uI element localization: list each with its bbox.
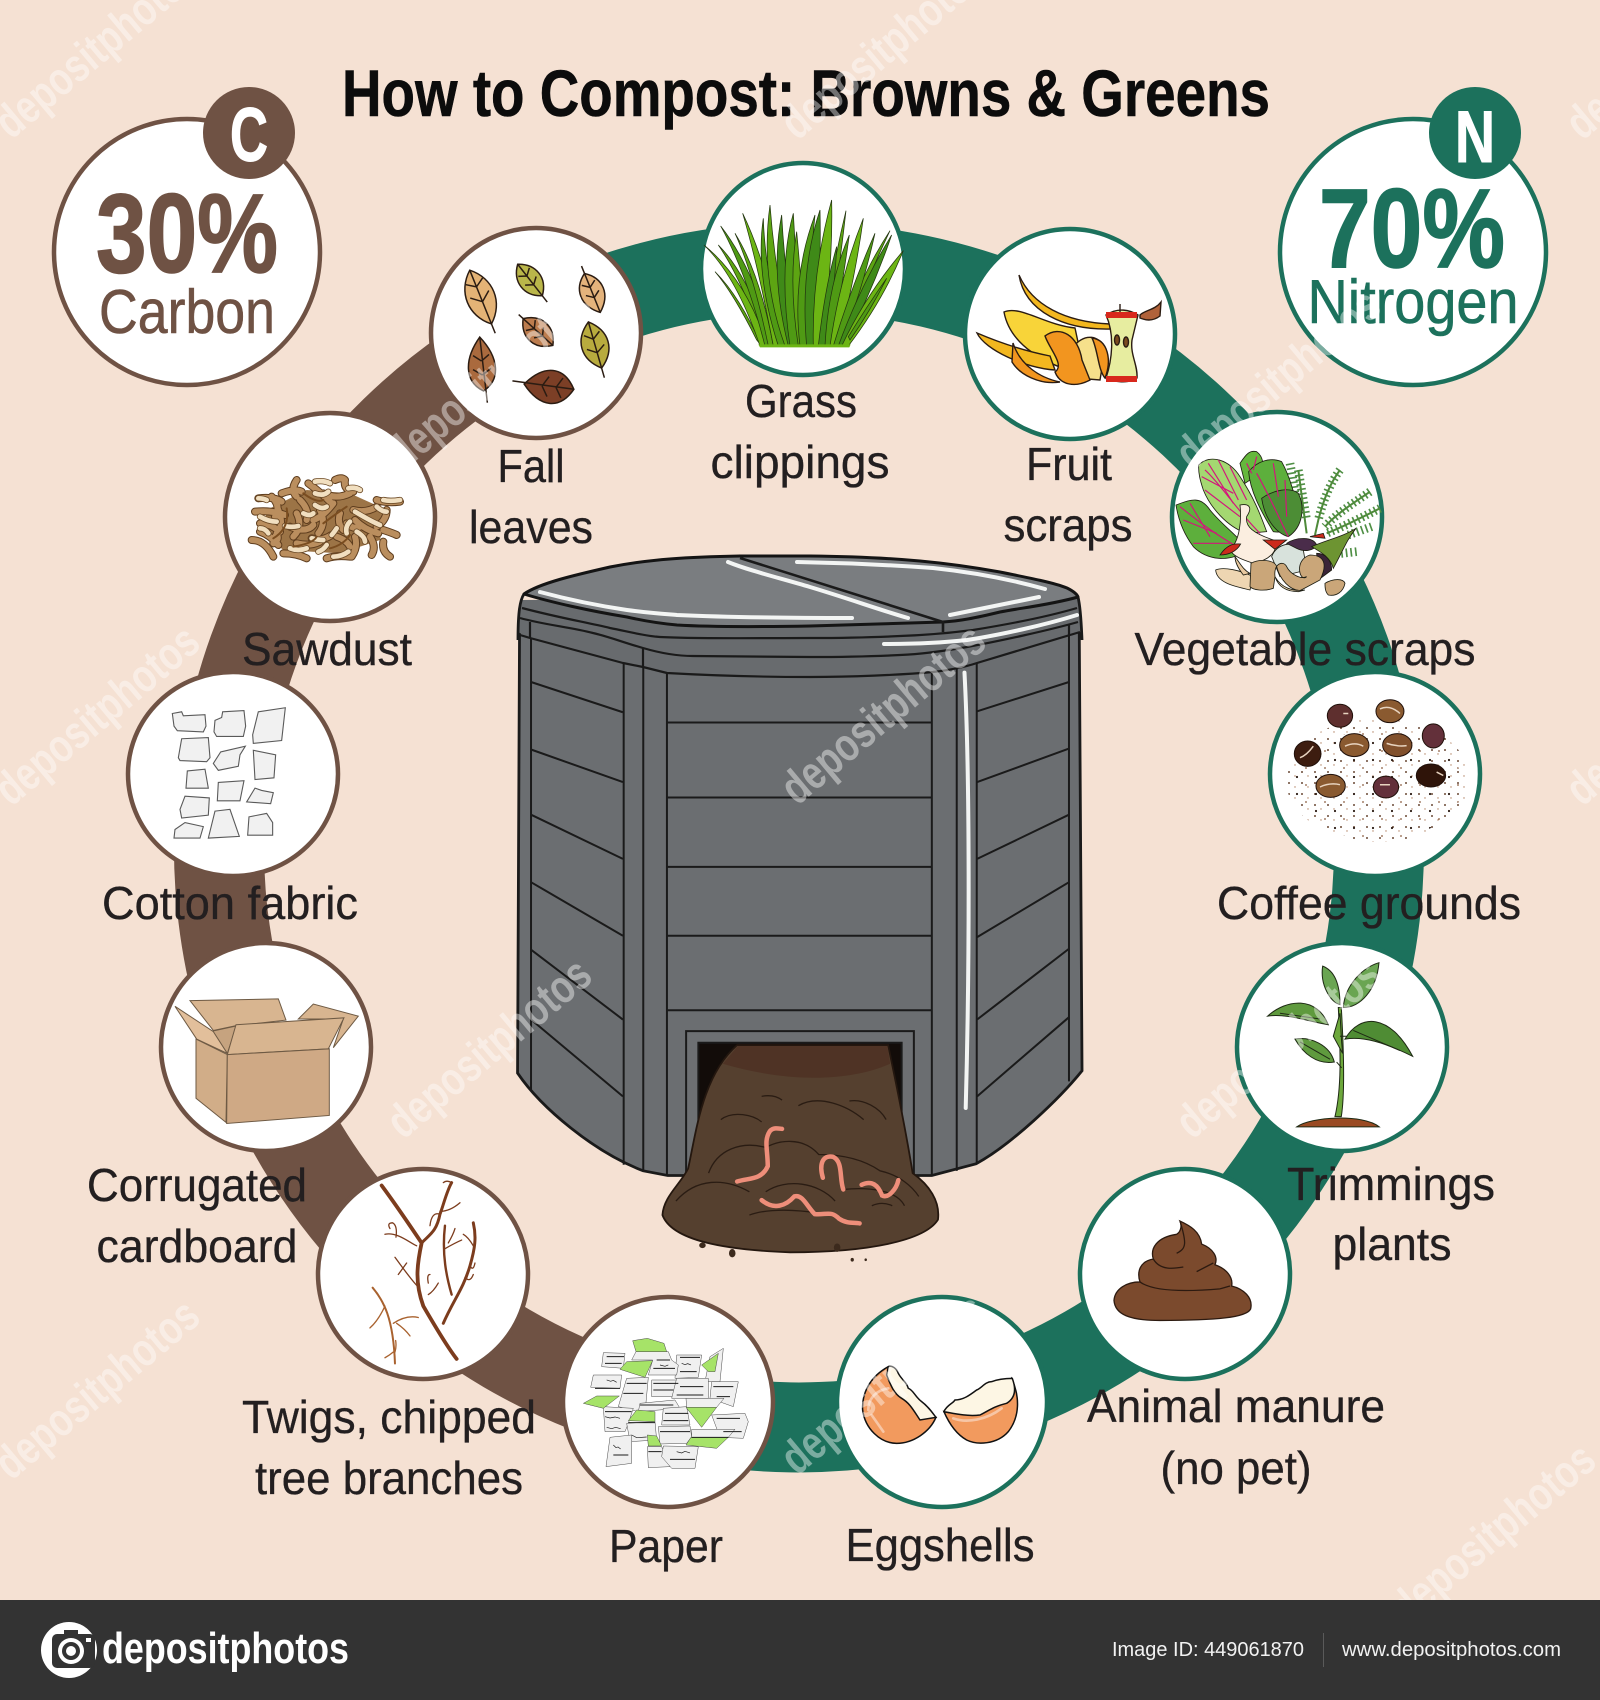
footer logo text: depositphotos [102, 1624, 349, 1673]
label: grass clippings: clippings [710, 436, 890, 488]
label: eggshells: Eggshells [846, 1519, 1034, 1571]
label: trimmings plants: plants [1332, 1218, 1452, 1270]
icon: fall leaves [457, 257, 617, 406]
title: How to Compost: Browns & Greens [342, 56, 1270, 130]
label: paper: Paper [609, 1520, 723, 1572]
label: cotton fabric: Cotton fabric [102, 877, 358, 929]
icon: coffee beans and grounds [1286, 700, 1470, 842]
label: fruit scraps: scraps [1004, 499, 1132, 551]
item: fruit scraps [965, 229, 1175, 551]
callout: 30% carbon: 30% [96, 171, 278, 296]
ring: nitrogen greens and carbon browns [219, 267, 1379, 1427]
callout: 30% carbon: C [230, 93, 268, 178]
vertical highlight [964, 673, 969, 1108]
icon: sawdust pile [252, 478, 400, 558]
icon: seedling [1268, 963, 1413, 1127]
item: twigs [242, 1169, 536, 1504]
watermarks: depositphotos [770, 613, 995, 814]
label: trimmings plants: Trimmings [1287, 1158, 1495, 1210]
label: twigs, chipped tree branches [242, 1391, 536, 1504]
watermarks: depositphotos [376, 278, 601, 479]
icon: eggshells [863, 1366, 1018, 1443]
label: fruit scraps: Fruit [1026, 438, 1112, 490]
label: fall leaves [469, 440, 593, 553]
callout: 70% nitrogen: 70% [1319, 166, 1505, 291]
icon: manure [1114, 1221, 1251, 1320]
icon: cardboard box [175, 999, 358, 1123]
callout: 30% carbon [54, 87, 320, 385]
label: animal manure (no pet) [1087, 1380, 1385, 1494]
callout: 30% carbon: Carbon [99, 278, 275, 347]
bin lid and rim [518, 556, 1082, 677]
item: grass clippings [701, 163, 905, 488]
label: fruit scraps [1004, 438, 1132, 551]
callout: 70% nitrogen: Nitrogen [1308, 268, 1518, 337]
label: corrugated cardboard: Corrugated [87, 1159, 307, 1211]
item: cotton fabric [102, 672, 358, 929]
item: paper [563, 1297, 773, 1572]
label: fall leaves: leaves [469, 501, 593, 553]
label: vegetable scraps: Vegetable scraps [1134, 623, 1476, 675]
icon: shredded paper [583, 1338, 748, 1468]
callout: 70% nitrogen: N [1455, 97, 1495, 178]
callout: 70% nitrogen [1280, 87, 1546, 385]
label: sawdust: Sawdust [242, 623, 412, 675]
icon: fruit scraps [977, 275, 1161, 384]
watermarks: depositphotos [1165, 947, 1390, 1148]
compost bin [518, 556, 1082, 1262]
item: vegetable scraps [1134, 412, 1476, 675]
bin body [518, 619, 1082, 1262]
footer bar [0, 1600, 1600, 1700]
icon: twigs [370, 1181, 475, 1363]
footer url: www.depositphotos.com [1341, 1639, 1561, 1661]
label: fall leaves: Fall [498, 440, 564, 492]
label: twigs, chipped tree branches: Twigs, chipped [242, 1391, 536, 1443]
item: fall leaves [431, 228, 641, 553]
item: eggshells [837, 1297, 1047, 1571]
watermarks: depositphotos [376, 947, 601, 1148]
label: grass clippings: Grass [745, 375, 857, 427]
icon: cotton scraps [172, 708, 285, 838]
label: corrugated cardboard [87, 1159, 307, 1272]
compost pile with worms [662, 1045, 938, 1262]
item: coffee grounds [1217, 672, 1521, 929]
item: animal manure [1080, 1169, 1385, 1494]
item: plant trimmings [1237, 943, 1495, 1270]
icon: footer camera logo [41, 1622, 97, 1678]
label: grass clippings [710, 375, 890, 488]
label: trimmings plants [1287, 1158, 1495, 1270]
watermarks: depositphotos [1165, 278, 1390, 479]
label: coffee grounds: Coffee grounds [1217, 877, 1521, 929]
icon: vegetable scraps [1176, 451, 1380, 595]
label: corrugated cardboard: cardboard [96, 1220, 298, 1272]
label: animal manure (no pet): (no pet) [1160, 1442, 1312, 1494]
icon: grass tuft [704, 200, 903, 347]
item: corrugated cardboard [87, 943, 371, 1272]
label: twigs, chipped tree branches: tree branches [255, 1452, 523, 1504]
bin door opening [686, 1031, 914, 1175]
label: animal manure (no pet): Animal manure [1087, 1380, 1385, 1432]
lid highlights [540, 562, 1077, 644]
item: sawdust [225, 413, 435, 675]
watermarks: depositphotos [770, 1283, 995, 1484]
footer image id: Image ID: 449061870 [1112, 1639, 1304, 1661]
